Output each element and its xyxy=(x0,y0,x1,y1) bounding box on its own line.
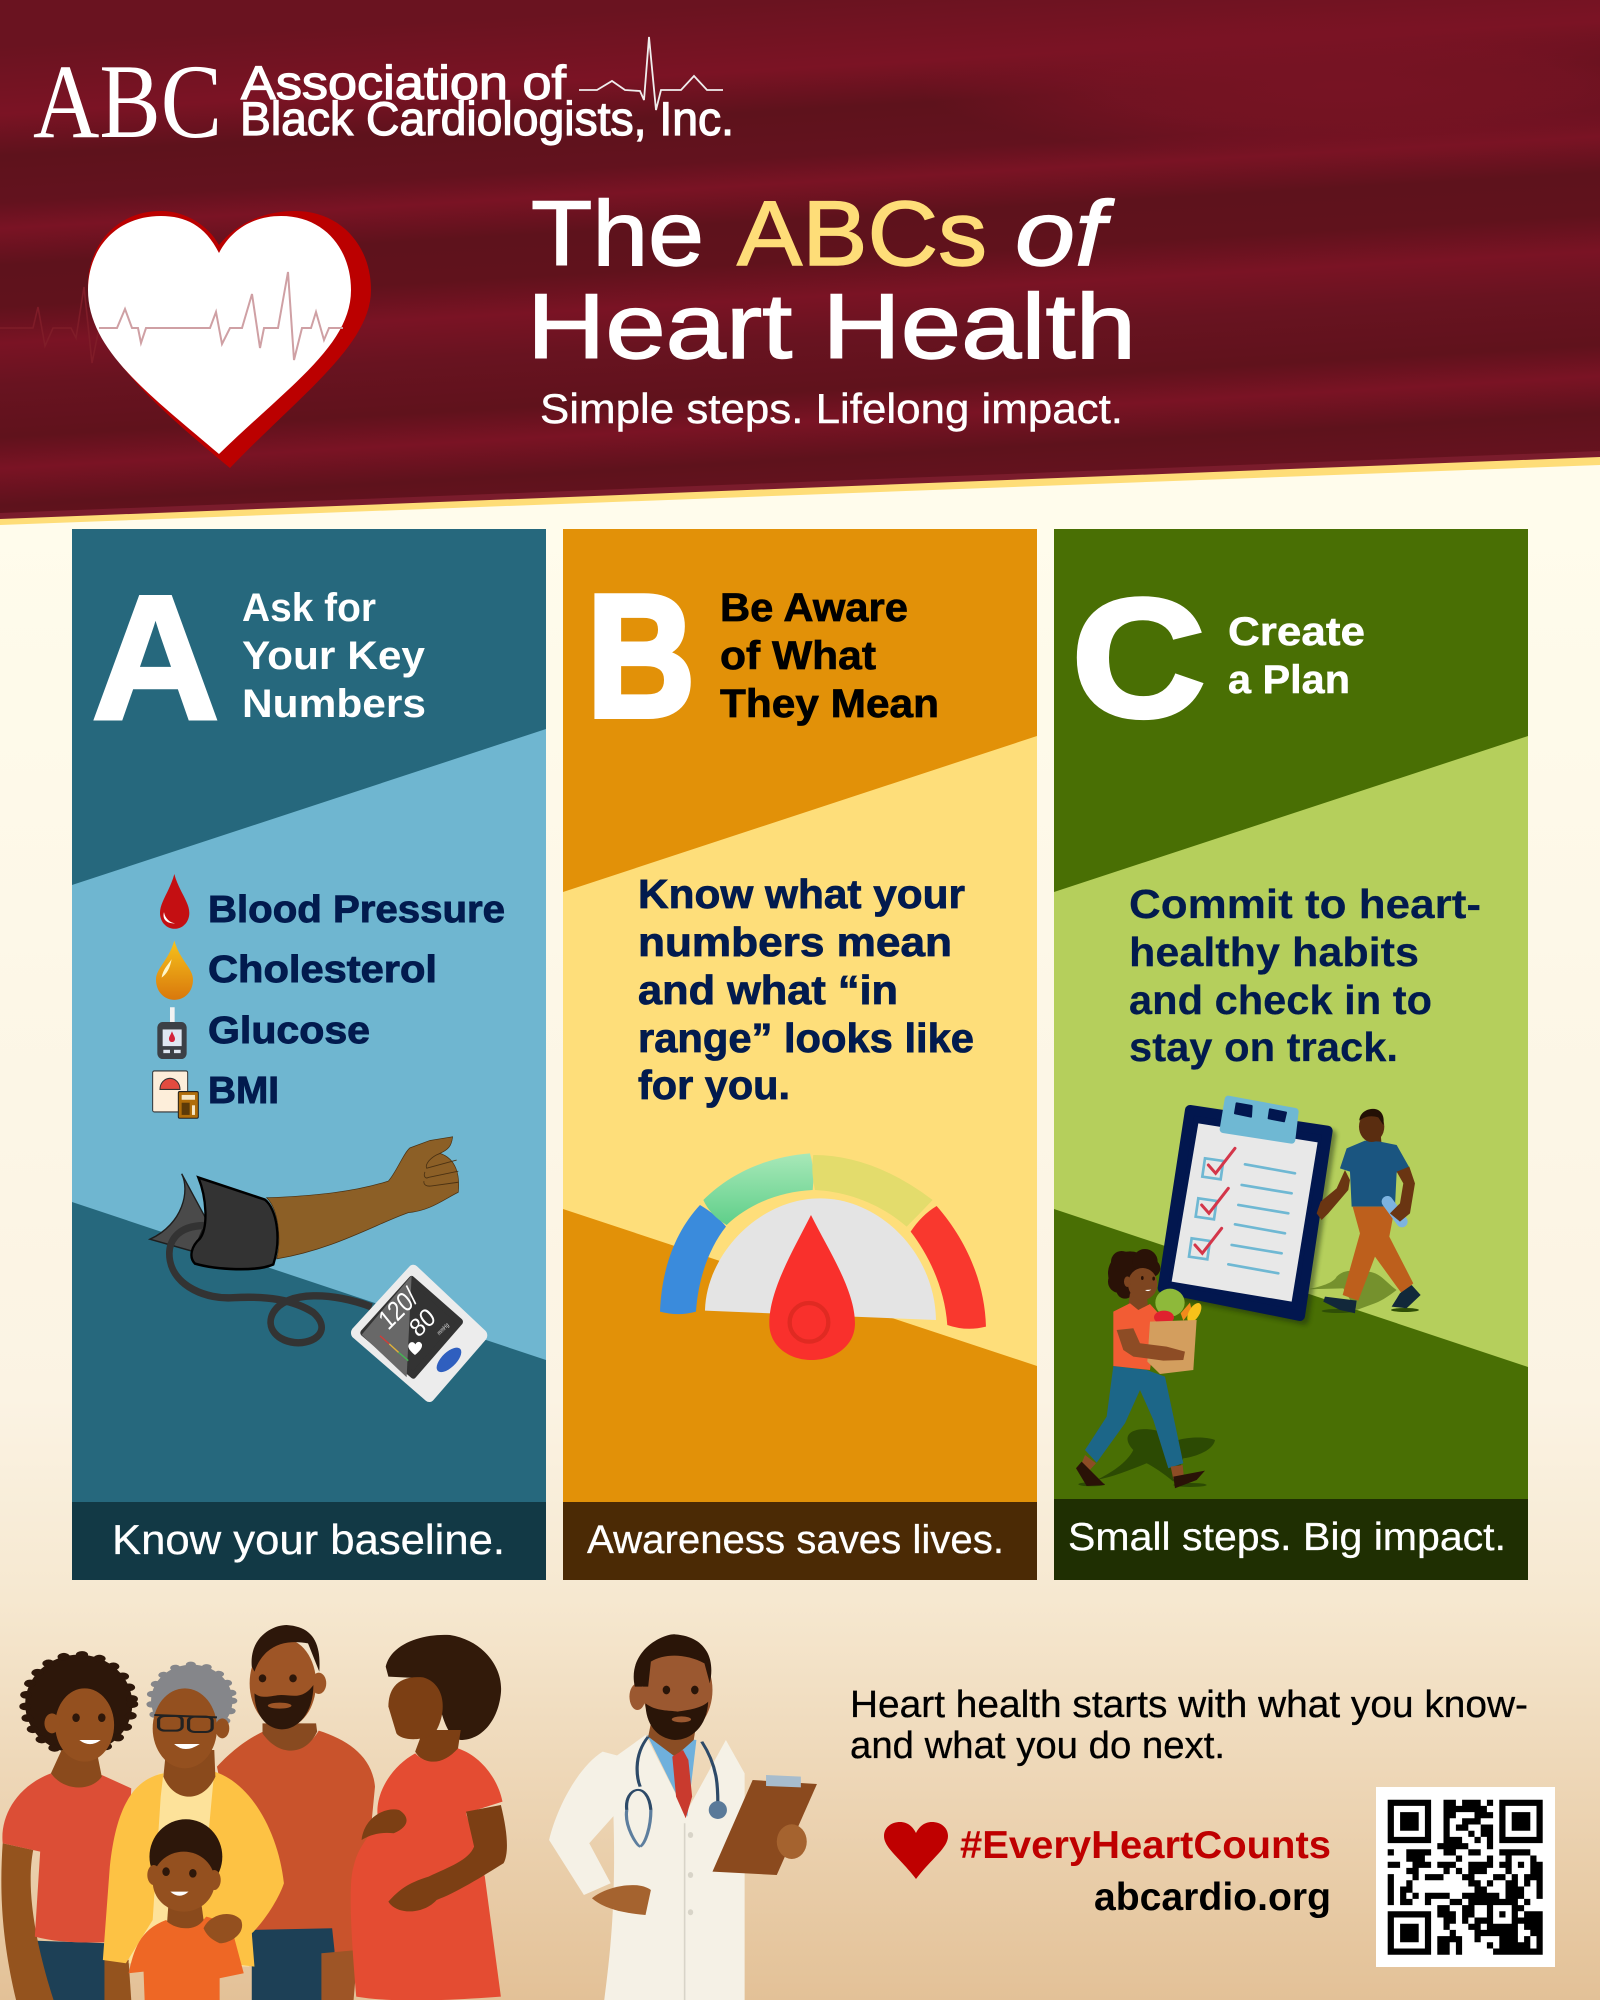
heading C: Create xyxy=(1228,610,1365,654)
body text C: and check in to xyxy=(1129,977,1432,1023)
body text B: and what “in xyxy=(638,967,898,1013)
icon: blood drop xyxy=(160,874,189,929)
list of key numbers: BMI xyxy=(208,1070,279,1112)
child xyxy=(129,1819,244,2000)
illustration: arm with blood pressure cuff and monitor: mmHg xyxy=(436,1321,451,1337)
title: ABCs xyxy=(737,183,987,285)
caption C: Small steps. Big impact. xyxy=(1068,1516,1506,1559)
illustration: doctor with clipboard xyxy=(549,1634,817,2000)
illustration: family group xyxy=(1,1625,507,2000)
heading A xyxy=(242,586,426,726)
heading B: Be Aware xyxy=(720,586,908,630)
heading A: Your Key xyxy=(242,634,426,678)
body text B xyxy=(638,871,974,1108)
list of key numbers: Blood Pressure xyxy=(208,889,505,931)
footer message xyxy=(850,1684,1528,1767)
logo: Association of Black Cardiologists: Association of xyxy=(241,56,567,109)
illustration: arm with blood pressure cuff and monitor xyxy=(150,1137,482,1396)
panel: C create a plan xyxy=(1054,529,1528,1580)
body text B: range” looks like xyxy=(638,1015,974,1061)
letter B: B xyxy=(587,558,695,753)
body text C: healthy habits xyxy=(1129,929,1419,975)
hashtag: #EveryHeartCounts xyxy=(960,1824,1331,1867)
panel: B be aware of what they mean xyxy=(563,529,1037,1580)
heading B: They Mean xyxy=(720,682,939,726)
title: The xyxy=(531,183,704,285)
icon: BMI scale and calculator xyxy=(153,1071,198,1118)
header banner xyxy=(0,0,1600,525)
letter A: A xyxy=(91,558,220,757)
footer message: and what you do next. xyxy=(850,1725,1225,1767)
man xyxy=(217,1625,375,2000)
heading B xyxy=(720,586,939,726)
illustration: arm with blood pressure cuff and monitor: 80 xyxy=(405,1303,441,1343)
title: of xyxy=(1015,183,1115,285)
logo: Association of Black Cardiologists: Black Cardiologists, Inc. xyxy=(240,92,734,145)
caption A: Know your baseline. xyxy=(112,1516,505,1563)
heading A: Numbers xyxy=(242,682,426,726)
caption B: Awareness saves lives. xyxy=(587,1518,1004,1562)
icon: glucose meter xyxy=(157,1007,187,1059)
illustration: clipboard checklist xyxy=(1163,1099,1332,1320)
heading A: Ask for xyxy=(242,586,376,630)
logo: Association of Black Cardiologists xyxy=(33,37,734,160)
illustration: man walking with water bottle xyxy=(1308,1109,1421,1313)
body text B: numbers mean xyxy=(638,919,952,965)
illustration: woman carrying groceries xyxy=(1076,1249,1215,1488)
icon: red heart xyxy=(884,1822,948,1879)
subtitle: Simple steps. Lifelong impact. xyxy=(540,385,1123,432)
logo: Association of Black Cardiologists: ABC xyxy=(33,43,222,160)
letter C: C xyxy=(1072,564,1205,752)
panel: A ask for your key numbers xyxy=(72,529,546,1580)
woman in red shirt xyxy=(1,1655,132,2000)
list of key numbers: Cholesterol xyxy=(208,949,437,991)
footer message: Heart health starts with what you know- xyxy=(850,1684,1528,1726)
QR code xyxy=(1376,1787,1555,1967)
body text B: for you. xyxy=(638,1062,790,1108)
list of key numbers xyxy=(208,889,505,1112)
body text C xyxy=(1129,881,1481,1070)
title xyxy=(527,183,1136,378)
heading B: of What xyxy=(720,634,876,678)
grandmother xyxy=(103,1665,284,2000)
illustration: blood drop gauge xyxy=(660,1153,986,1360)
pregnant woman xyxy=(351,1635,507,2000)
icon: heart with ECG line xyxy=(88,211,371,468)
heading C xyxy=(1228,610,1365,702)
body text B: Know what your xyxy=(638,871,965,917)
illustration: arm with blood pressure cuff and monitor: 120/ xyxy=(373,1281,423,1336)
website: abcardio.org xyxy=(1094,1876,1331,1919)
body text C: stay on track. xyxy=(1129,1024,1398,1070)
list of key numbers: Glucose xyxy=(208,1010,370,1052)
list icons xyxy=(153,874,198,1118)
body text C: Commit to heart- xyxy=(1129,881,1481,927)
icon: cholesterol drop xyxy=(156,941,193,1000)
title: Heart Health xyxy=(527,276,1136,378)
heading C: a Plan xyxy=(1228,658,1350,702)
